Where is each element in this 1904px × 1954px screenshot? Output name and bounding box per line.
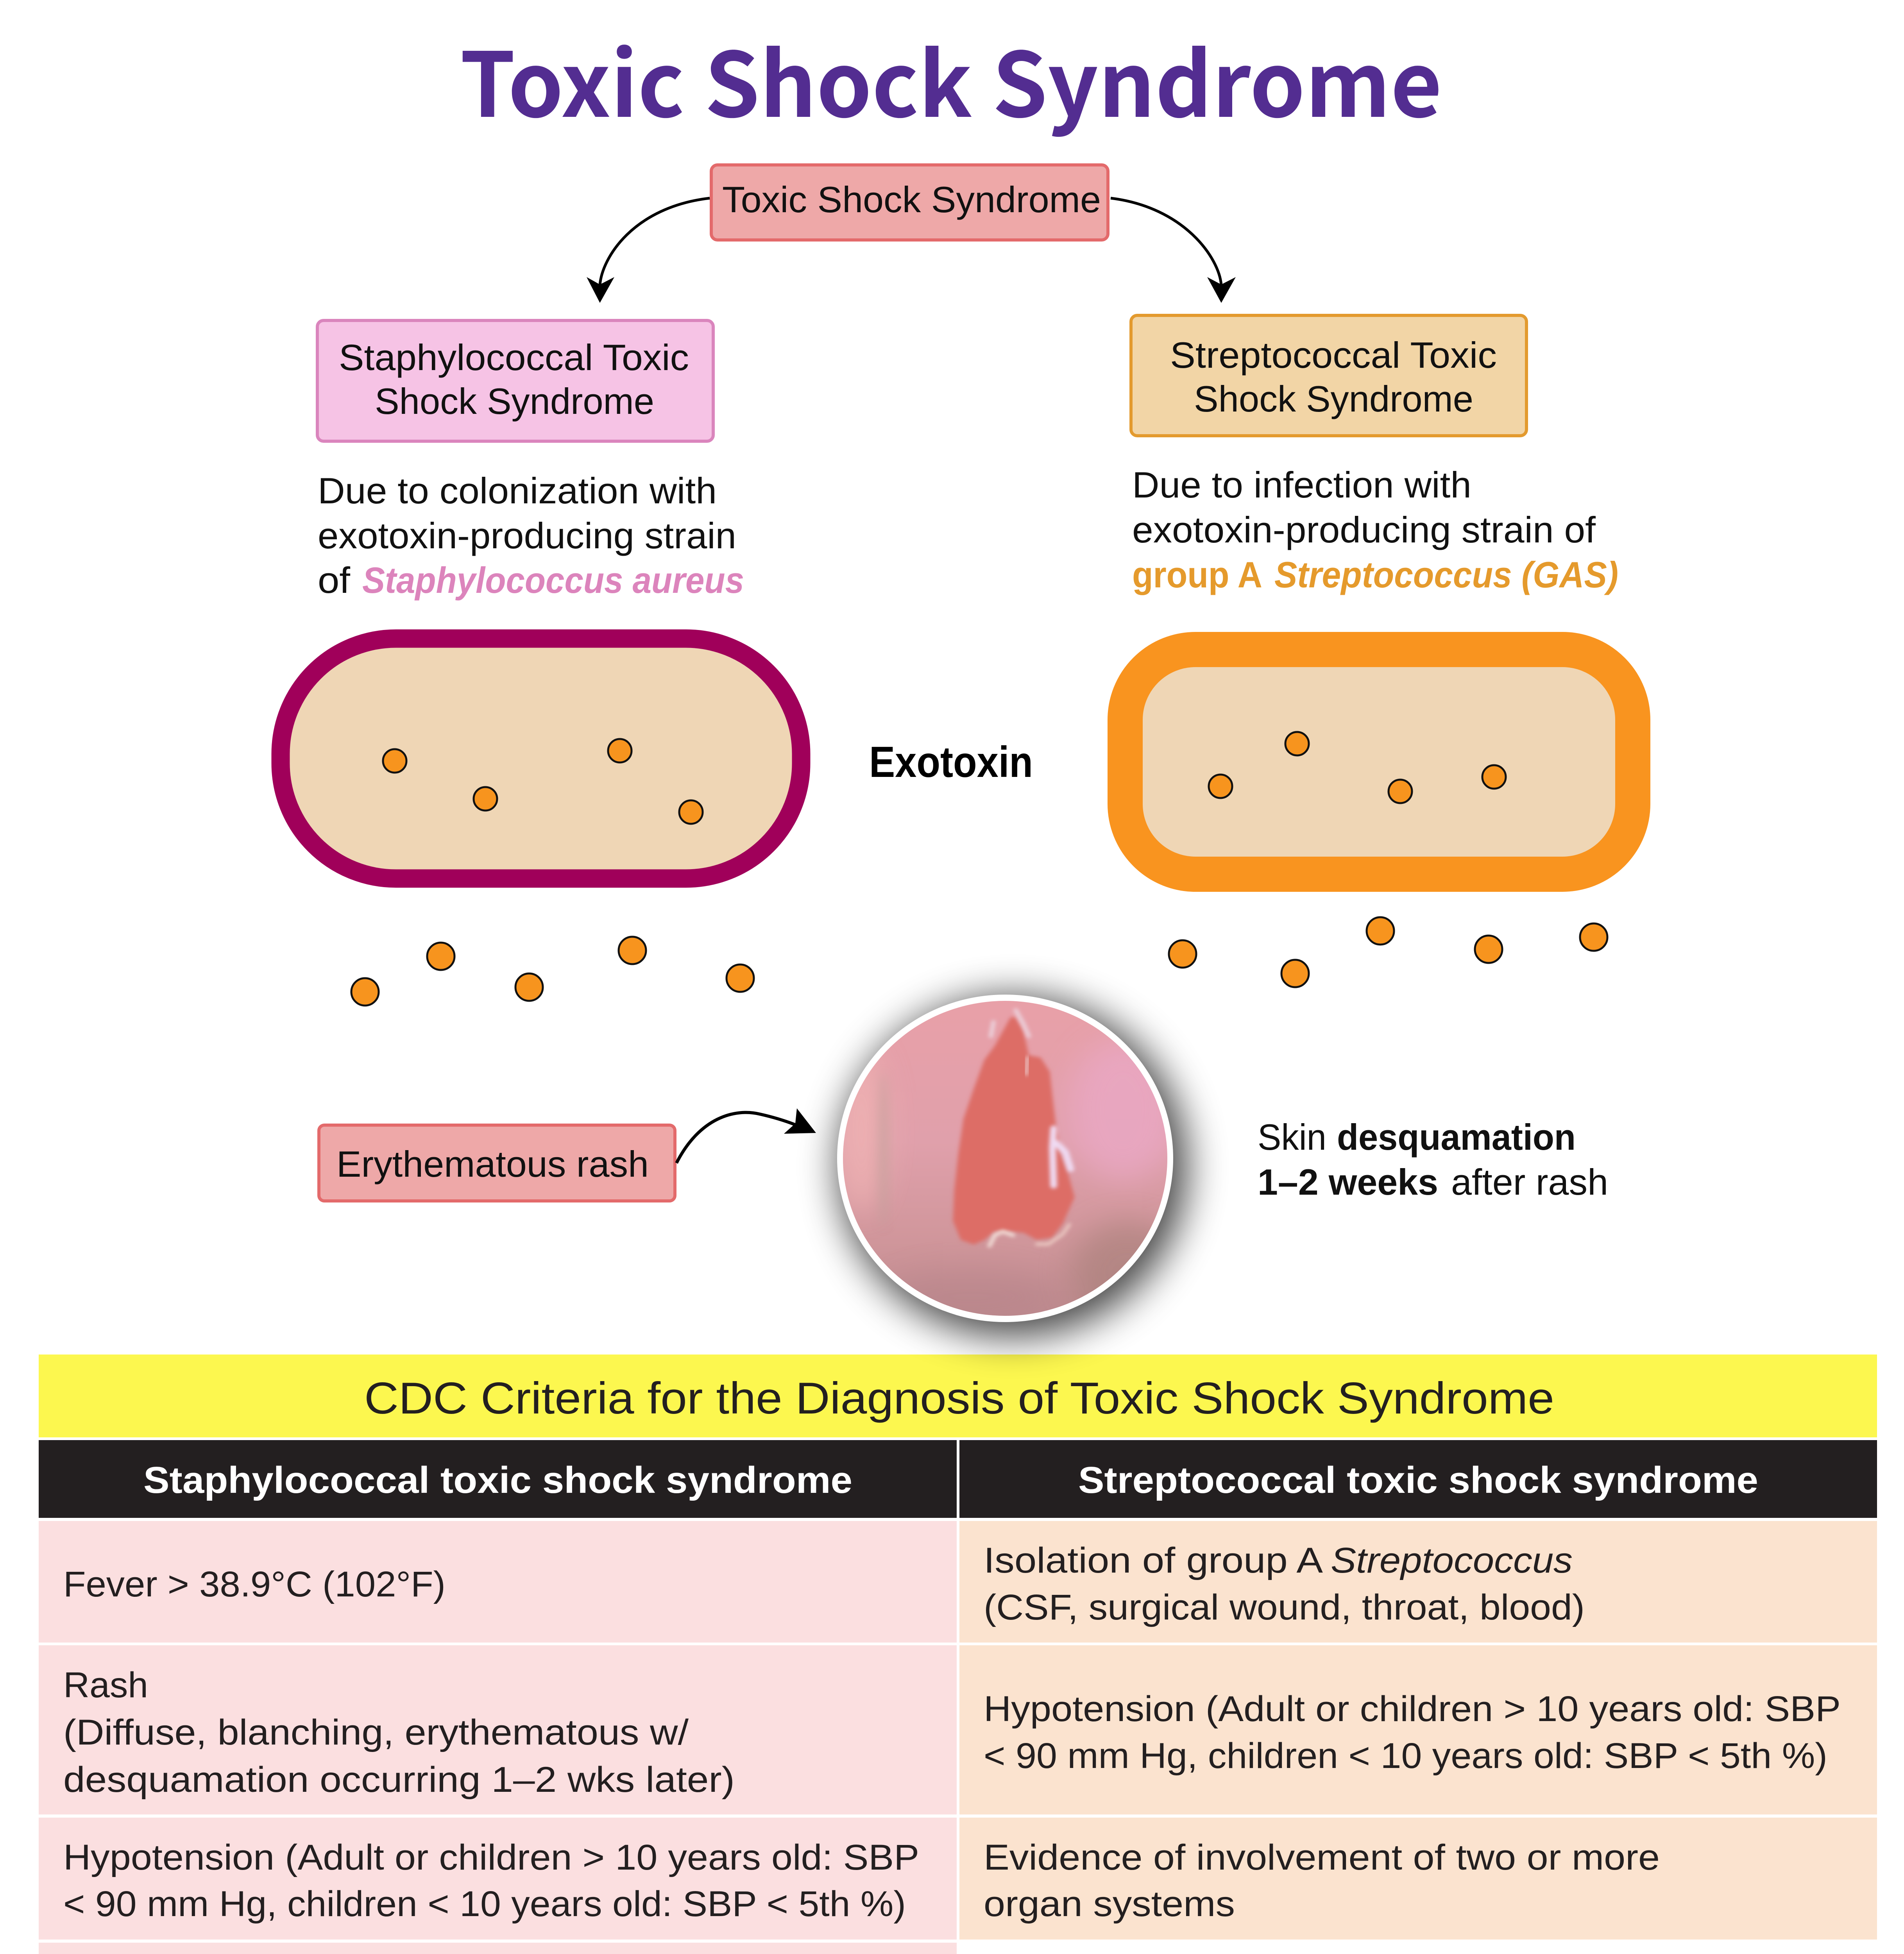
right row: hypotension: < 90 mm Hg, children < 10 years old: SBP < 5th %) — [984, 1736, 1827, 1776]
box: streptococcal toxic shock syndrome — [1131, 315, 1526, 436]
table header: staphylococcal: Staphylococcal toxic shock syndrome — [143, 1459, 852, 1501]
text: skin desquamation — [1258, 1117, 1608, 1202]
left row: hypotension: < 90 mm Hg, children < 10 years old: SBP < 5th %) — [63, 1884, 906, 1924]
box: Toxic Shock Syndrome: Toxic Shock Syndrome — [722, 179, 1101, 220]
label: exotoxin: Exotoxin — [869, 738, 1033, 786]
box: staphylococcal toxic shock syndrome: Staphylococcal Toxic — [339, 337, 689, 378]
left row: hypotension: Hypotension (Adult or children > 10 years old: SBP — [63, 1838, 919, 1877]
photo drop shadow — [839, 997, 1187, 1337]
text: streptococcal cause: exotoxin-producing strain of — [1132, 509, 1596, 550]
staph exotoxin dots inside — [383, 739, 703, 824]
bacterium: streptococcus — [1125, 650, 1633, 874]
released exotoxin dots: streptococcus — [1169, 917, 1607, 987]
strep exotoxin dots inside — [1209, 732, 1506, 803]
table header: streptococcal — [959, 1440, 1877, 1518]
text: skin desquamation: desquamation — [1337, 1117, 1576, 1158]
box: staphylococcal toxic shock syndrome: Shock Syndrome — [375, 381, 654, 422]
left row: rash: Rash — [63, 1665, 148, 1705]
box: streptococcal toxic shock syndrome: Streptococcal Toxic — [1170, 335, 1497, 376]
text: skin desquamation: 1–2 weeks — [1258, 1161, 1438, 1202]
right row: isolation: (CSF, surgical wound, throat, blood) — [984, 1587, 1585, 1627]
bacterium: staphylococcus — [281, 639, 801, 879]
right row: hypotension — [959, 1645, 1877, 1814]
banner: CDC criteria: CDC Criteria for the Diagnosis of Toxic Shock Syndrome — [364, 1374, 1554, 1423]
right row: organ involvement: Evidence of involvement of two or more — [984, 1838, 1660, 1877]
left row: fever: Fever > 38.9°C (102°F) — [63, 1564, 446, 1604]
right row: hypotension: Hypotension (Adult or children > 10 years old: SBP — [984, 1689, 1841, 1729]
arrow: rash to photo — [676, 1108, 816, 1163]
box: erythematous rash: Erythematous rash — [336, 1143, 649, 1185]
text: skin desquamation: Skin — [1258, 1117, 1326, 1158]
text: skin desquamation: after rash — [1451, 1161, 1608, 1202]
box: Toxic Shock Syndrome — [711, 165, 1108, 240]
text: staphylococcal cause: Due to colonization with — [318, 470, 717, 511]
text: staphylococcal cause: Staphylococcus aureus — [362, 560, 744, 601]
table header: streptococcal: Streptococcal toxic shock syndrome — [1078, 1459, 1758, 1501]
left row: rash: desquamation occurring 1–2 wks later) — [63, 1760, 735, 1800]
photo: skin desquamation — [832, 993, 1187, 1337]
box: staphylococcal toxic shock syndrome — [317, 320, 713, 441]
box: erythematous rash — [319, 1125, 675, 1201]
released exotoxin dots: staphylococcus — [351, 937, 754, 1006]
title: Toxic Shock Syndrome — [460, 14, 1442, 143]
right row: isolation: Isolation of group A — [984, 1541, 1323, 1580]
text: streptococcal cause — [1132, 464, 1618, 595]
text: staphylococcal cause: of — [318, 560, 351, 601]
text: streptococcal cause: Streptococcus (GAS) — [1274, 554, 1618, 595]
left row: rash: (Diffuse, blanching, erythematous w/ — [63, 1712, 689, 1752]
text: streptococcal cause: group A — [1132, 554, 1262, 595]
left row: hypotension — [39, 1818, 957, 1940]
text: streptococcal cause: Due to infection with — [1132, 464, 1471, 505]
right row: isolation: Streptococcus — [1331, 1541, 1573, 1580]
text: staphylococcal cause — [318, 470, 744, 601]
arrow: to staphylococcal — [587, 198, 710, 303]
left row: rash — [39, 1645, 957, 1814]
text: staphylococcal cause: exotoxin-producing strain — [318, 515, 736, 556]
right row: isolation — [959, 1521, 1877, 1643]
arrow: to streptococcal — [1111, 198, 1236, 303]
left row: fever — [39, 1521, 957, 1643]
box: streptococcal toxic shock syndrome: Shock Syndrome — [1194, 378, 1473, 419]
left row: organ involvement — [39, 1943, 957, 1954]
right row: organ involvement — [959, 1818, 1877, 1940]
banner: CDC criteria — [39, 1355, 1877, 1437]
right row: organ involvement: organ systems — [984, 1884, 1235, 1924]
table header: staphylococcal — [39, 1440, 957, 1518]
